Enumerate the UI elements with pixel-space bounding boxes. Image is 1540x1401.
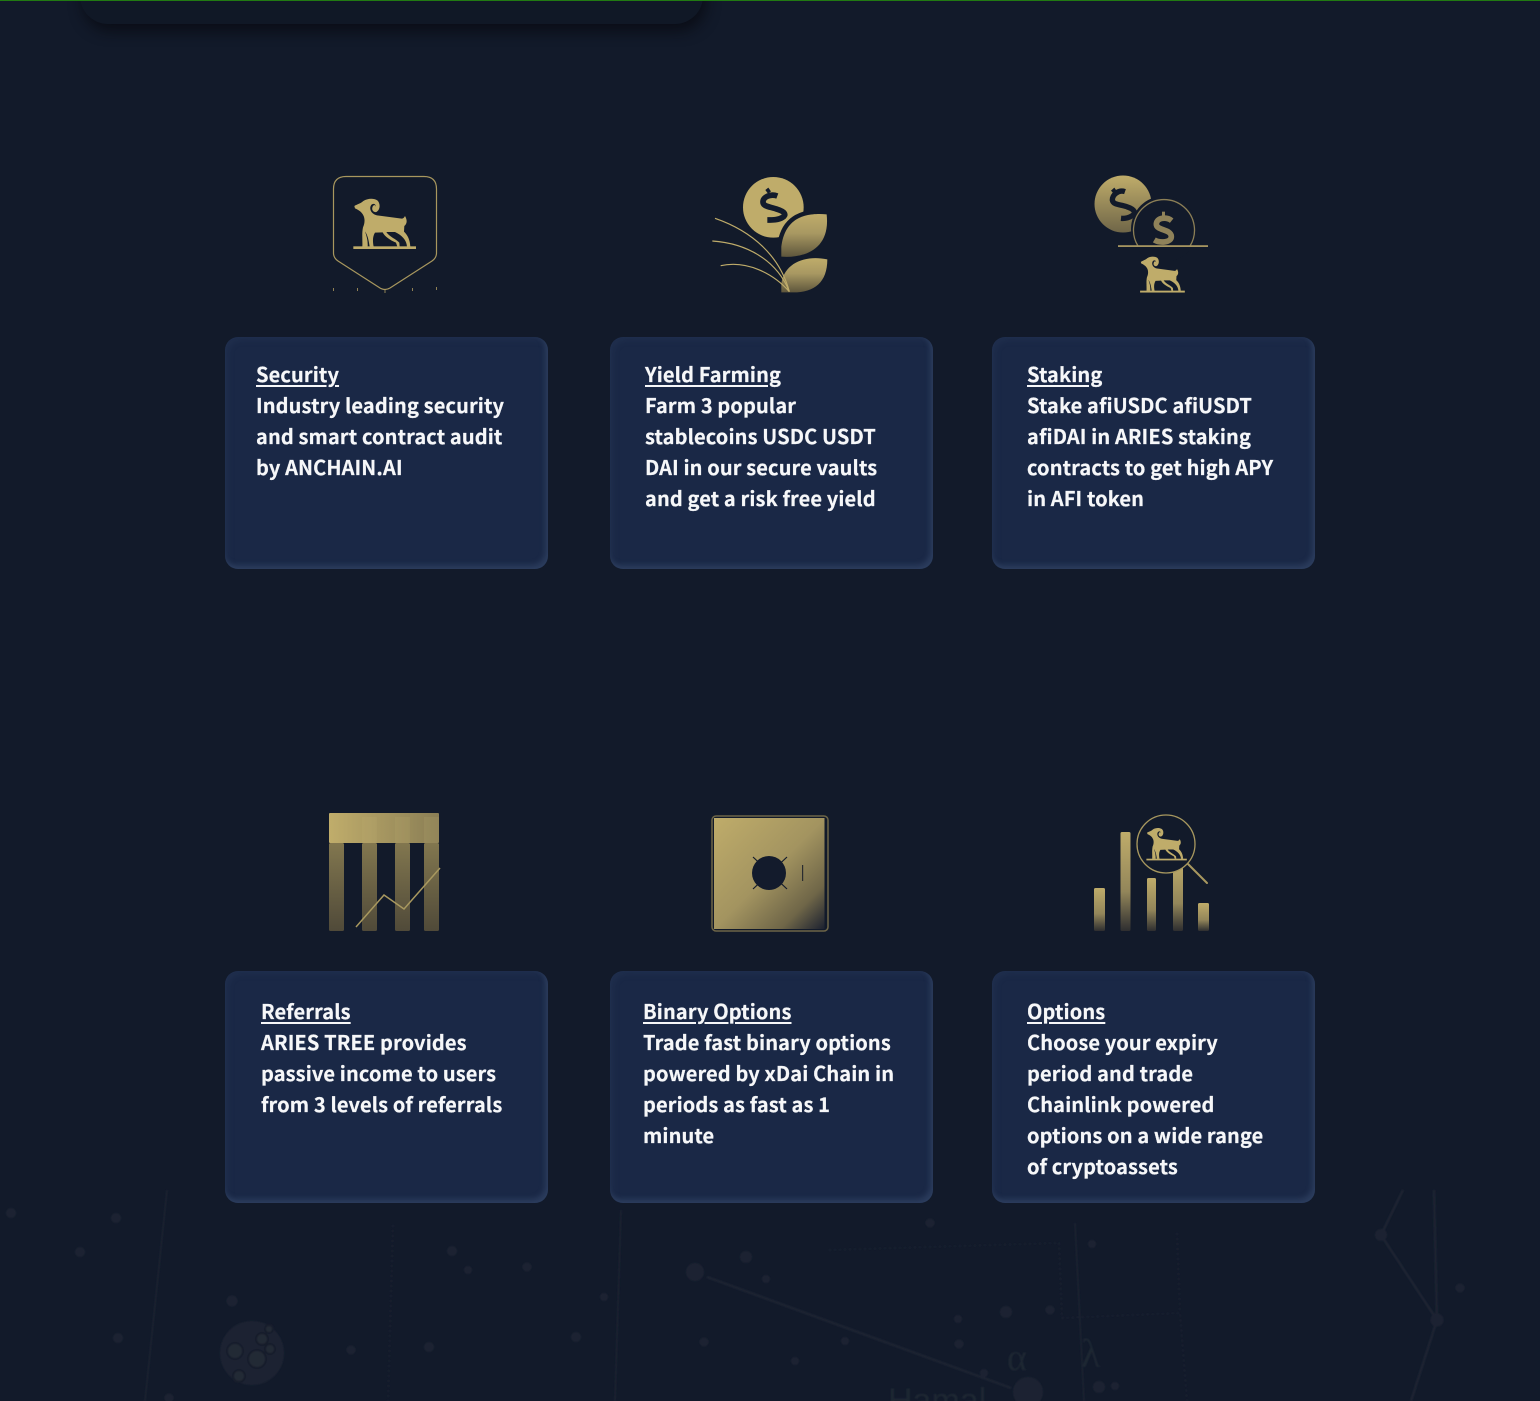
starry constellation background: λ: [1081, 1331, 1101, 1376]
panel: binary options: [610, 971, 932, 1203]
text: referrals: [260, 996, 502, 1118]
text: staking: Stake afiUSDC afiUSDT: [1027, 390, 1252, 419]
text: binary options: [643, 996, 894, 1149]
text: options: Chainlink powered: [1027, 1089, 1214, 1118]
dark panel cut off at top: [80, 0, 703, 24]
text: binary options: minute: [643, 1120, 714, 1149]
panel: options: [992, 971, 1314, 1203]
text: yield farming: [644, 359, 877, 512]
panel: staking: [992, 337, 1314, 569]
text: binary options: Binary Options: [643, 996, 792, 1025]
panel: yield farming: [610, 337, 932, 569]
text: staking: Staking: [1027, 359, 1102, 388]
top green rule: [0, 0, 1540, 1]
text: referrals: Referrals: [261, 996, 351, 1025]
text: options: options on a wide range: [1027, 1120, 1263, 1149]
text: options: Choose your expiry: [1027, 1027, 1218, 1056]
text: security: by ANCHAIN.AI: [256, 452, 403, 481]
panel: security: [225, 337, 548, 569]
text: staking: afiDAI in ARIES staking: [1027, 421, 1251, 450]
text: yield farming: DAI in our secure vaults: [645, 452, 877, 481]
text: staking: [1027, 359, 1274, 512]
text: yield farming: Farm 3 popular: [645, 390, 796, 419]
text: referrals: ARIES TREE provides: [261, 1027, 467, 1056]
text: binary options: Trade fast binary options: [643, 1027, 891, 1056]
text: security: and smart contract audit: [256, 421, 502, 450]
text: options: period and trade: [1027, 1058, 1193, 1087]
panel: referrals: [225, 971, 548, 1203]
text: options: of cryptoassets: [1027, 1151, 1178, 1180]
text: binary options: powered by xDai Chain in: [643, 1058, 894, 1087]
text: security: Industry leading security: [256, 390, 504, 419]
text: referrals: from 3 levels of referrals: [261, 1089, 502, 1118]
text: staking: in AFI token: [1027, 483, 1144, 512]
text: options: [1027, 996, 1263, 1180]
text: staking: contracts to get high APY: [1027, 452, 1273, 481]
text: security: [256, 359, 504, 481]
text: referrals: passive income to users: [261, 1058, 496, 1087]
text: yield farming: and get a risk free yield: [645, 483, 876, 512]
starry constellation background: α: [1007, 1337, 1027, 1379]
text: yield farming: stablecoins USDC USDT: [645, 421, 876, 450]
text: binary options: periods as fast as 1: [643, 1089, 830, 1118]
text: yield farming: Yield Farming: [645, 359, 781, 388]
text: security: Security: [256, 359, 339, 388]
text: options: Options: [1027, 996, 1105, 1025]
